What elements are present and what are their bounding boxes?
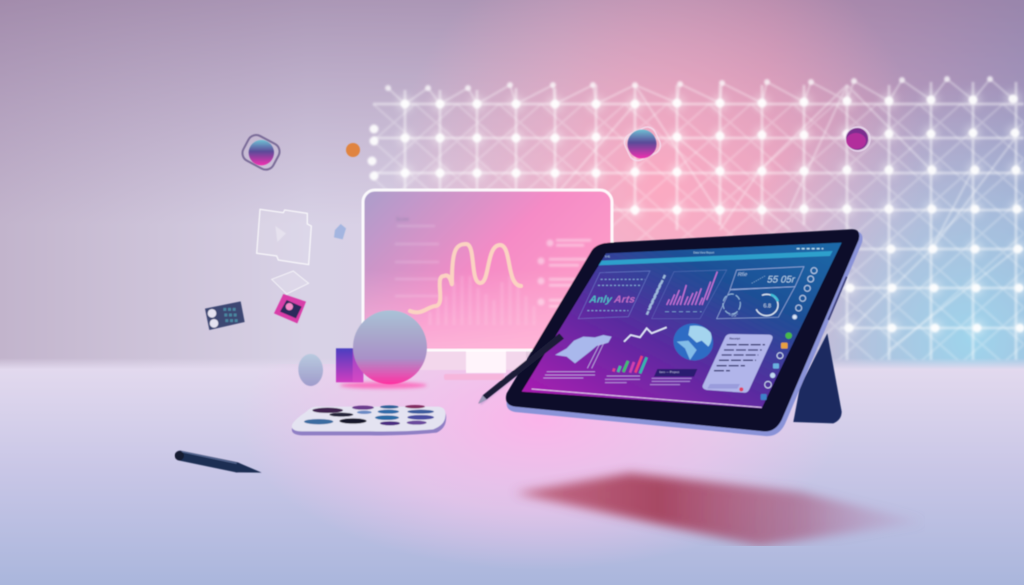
analytics panel [578,271,650,319]
cube [336,348,363,382]
orb right [846,127,870,151]
monitor stand [420,348,526,380]
gauge panel [717,287,795,319]
stylus shadow [480,363,530,403]
tablet [506,229,863,436]
sphere and desk objects [175,132,530,473]
monitor fade [365,192,610,348]
colour bars [613,356,647,373]
desk pen [175,451,262,473]
stat panel: 55 05r [766,274,797,285]
small egg [298,354,323,386]
pattern tile [274,294,306,323]
tablet silver edge [507,231,863,436]
wall background [0,0,1024,375]
small cube icon [334,224,346,239]
large sphere [353,310,427,384]
zigzag line [624,327,667,342]
monitor frame [363,190,612,350]
bar chart panel [652,270,727,319]
orb left [622,124,663,163]
side button [828,277,847,320]
map leader lines [547,343,604,372]
analytics panel: Anly [588,295,614,306]
stat panel [730,267,804,289]
outline tile [272,271,309,294]
status bar [599,251,833,265]
gauge panel: 6.8 [763,304,771,310]
contact shadow [340,382,427,389]
button palette [292,405,446,435]
status text [605,249,823,258]
red floor shadow [515,473,925,546]
document card [703,334,773,393]
monitor left labels: Score [396,217,409,223]
status text: 9:41 [605,254,611,258]
tablet kickstand [793,333,842,423]
desk floor [0,358,1024,585]
orange ball [346,143,360,157]
monitor left labels [395,217,439,297]
right top icons [793,268,817,319]
stat panel: Rfie [737,272,748,278]
map area [555,335,612,363]
grid nodes [372,79,1020,328]
monitor bars [430,276,534,325]
app dock icons [761,332,792,400]
caption tag [654,369,697,377]
analytics panel: Arts [612,295,637,306]
background monitor [363,190,612,380]
document card: Receipt [729,336,740,340]
icon strip [647,275,665,315]
soft photo layer [175,124,925,546]
tablet screen [522,243,842,408]
floating orb [239,132,283,173]
status text: Data View Report [693,250,714,254]
caption lines [543,375,692,385]
caption tag: Item — Project [659,370,679,374]
network grid [373,79,1024,360]
dark panel [205,301,245,330]
gauge panel: ~95" [728,313,738,318]
grid node glow [405,99,1020,328]
stylus [478,333,564,404]
monitor line chart [410,244,521,312]
floating orbs on grid [622,124,870,163]
tablet bezel [506,229,859,431]
bottom progress line [532,389,762,407]
folder outline [257,209,311,265]
monitor right legend [538,239,591,308]
globe [669,319,717,365]
